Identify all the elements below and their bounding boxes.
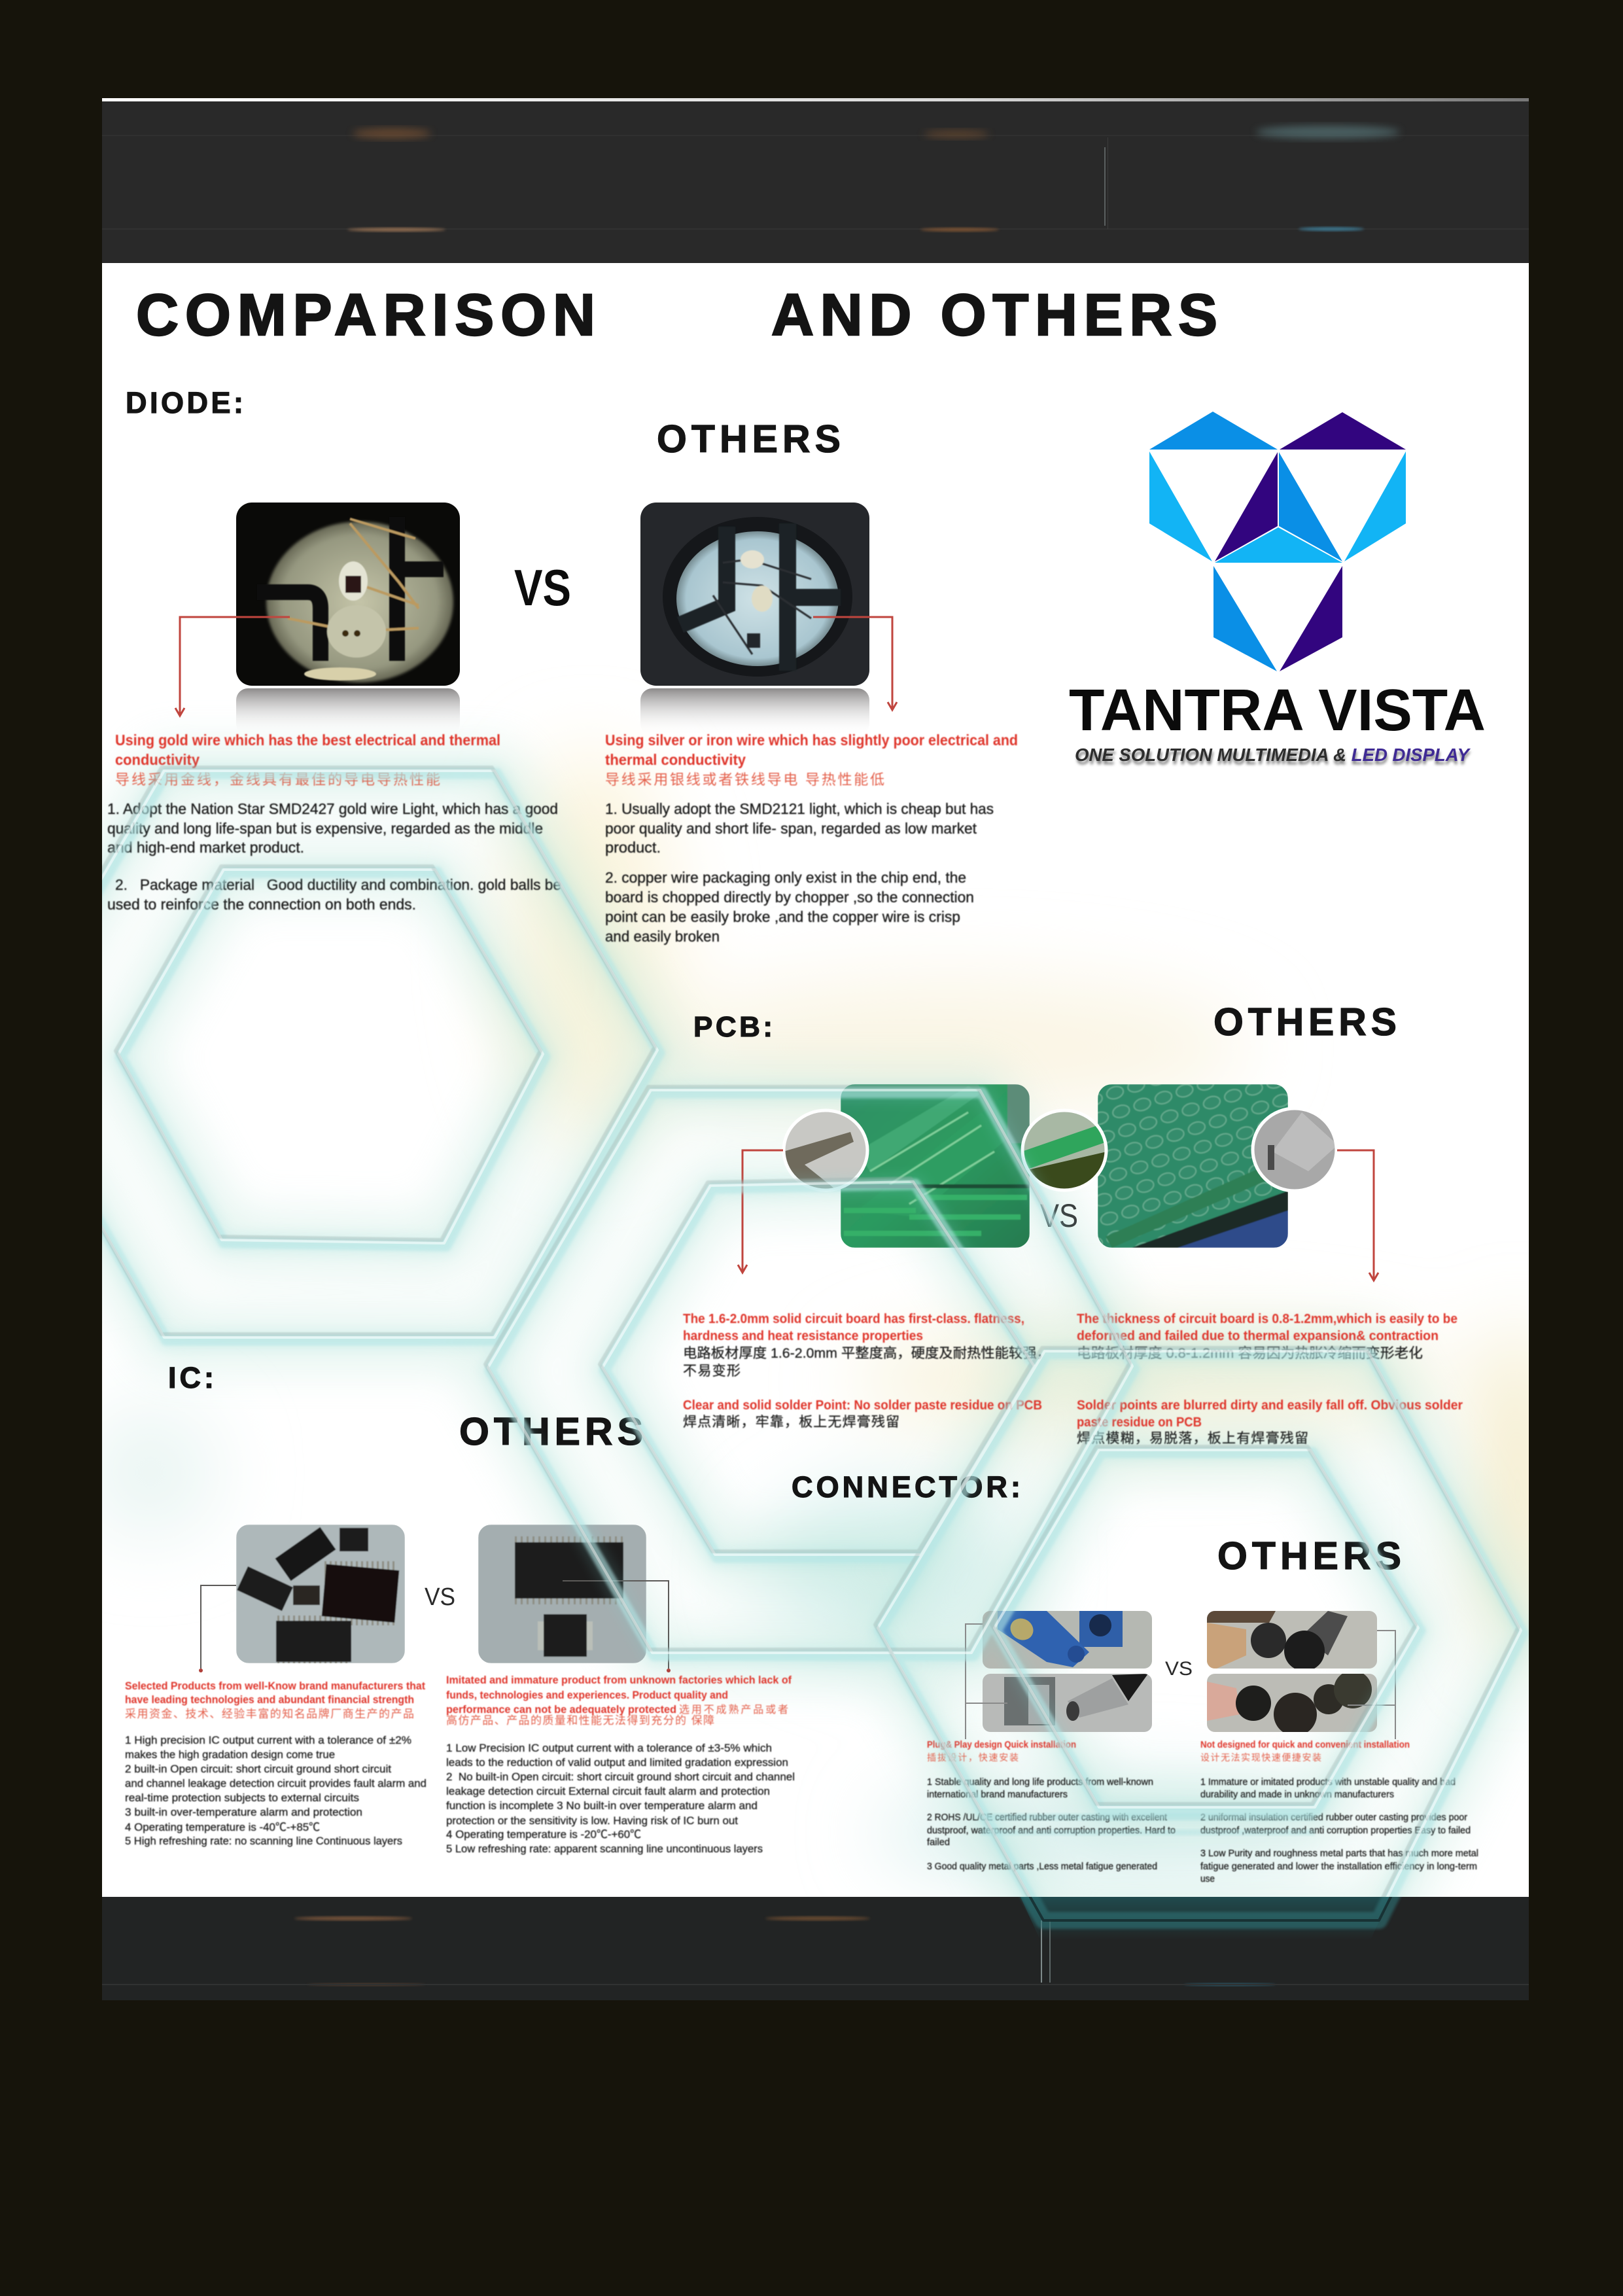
text: quality connector description: international brand manufacturers [927,1790,1068,1800]
text: imitated IC description: 高仿产品、产品的质量和性能无法得到充分的 保障 [446,1714,714,1727]
text: thin board description: paste residue on PCB [1077,1415,1202,1430]
text: quality connector description: dustproof, waterproof and anti corruption properties. Hard to [927,1826,1176,1836]
text: silver wire description: 2. copper wire packaging only exist in the chip end, the [605,869,966,886]
text: selected IC description: 3 built-in over-temperature alarm and protection [125,1806,362,1818]
arrow: solid board callout [738,1150,783,1273]
text: other connector description: use [1200,1874,1215,1884]
arrow: thin board callout [1337,1150,1378,1280]
heading: others: OTHERS [1213,1000,1397,1044]
text: silver wire description: thermal conductivity [605,751,746,768]
logo tagline: ONE SOLUTION MULTIMEDIA & LED DISPLAY [1075,745,1471,765]
heading: pcb: PCB: [693,1011,773,1043]
text: other connector description: Not designed for quick and convenient installation [1200,1740,1410,1750]
text: thin board description: 焊点模糊，易脱落，板上有焊膏残留 [1077,1431,1308,1446]
text: solid board description: Clear and solid solder Point: No solder paste residue on PCB [683,1398,1042,1413]
text: gold wire description: 1. Adopt the Nation Star SMD2427 gold wire Light, which has a good [107,800,558,817]
heading: others: OTHERS [657,417,841,461]
text: silver wire description: point can be easily broke ,and the copper wire is crisp [605,908,960,925]
text: gold wire description: used to reinforce the connection on both ends. [107,896,416,913]
reflection: gold wire LED [236,688,460,735]
logo mark [1149,412,1406,671]
vs label: VS [1040,1197,1078,1234]
text: imitated IC description: performance can not be adequately protected [446,1704,676,1716]
photo: silver wire LED [640,503,869,686]
text: selected IC description [125,1680,427,1847]
arrow: silver wire callout [813,617,897,710]
text: gold wire description [107,732,561,913]
photo: selected ICs [236,1525,405,1663]
text: quality connector description: Plug& Play design Quick installation [927,1740,1076,1750]
photo: gold wire LED [236,503,460,686]
text: thin board description: Solder points are blurred dirty and easily fall off. Obvious solder [1077,1398,1463,1413]
text: solid board description: The 1.6-2.0mm solid circuit board has first-class. flatness, [683,1312,1024,1326]
heading: ic: IC: [168,1361,214,1394]
heading: diode: DIODE: [126,386,243,419]
infographic canvas [102,98,1529,2000]
text: quality connector description [927,1740,1176,1872]
text: solid board description [683,1312,1051,1430]
text: imitated IC description [446,1674,795,1855]
text: selected IC description: 2 built-in Open circuit: short circuit ground short circuit [125,1763,391,1775]
photo: black cable connector [1207,1670,1377,1736]
text: quality connector description: 3 Good quality metal parts ,Less metal fatigue generated [927,1862,1157,1872]
text: imitated IC description: funds, technologies and experiences. Product quality and [446,1689,728,1701]
section: diode [107,386,1018,945]
text: quality connector description: failed [927,1837,950,1848]
logo: Tantra Vista [1069,412,1486,768]
photo: solid circuit board [841,1084,1030,1248]
text: silver wire description: product. [605,839,661,856]
reflection: silver wire LED [640,688,869,735]
photo: blue powercon connector [983,1611,1152,1669]
text: selected IC description: makes the high gradation design come true [125,1748,335,1761]
text: gold wire description: conductivity [115,751,200,768]
text: gold wire description: quality and long life-span but is expensive, regarded as the middle [107,820,543,837]
text: other connector description: dustproof ,waterproof and anti corruption properties Easy to failed [1200,1826,1471,1836]
text: selected IC description: Selected Products from well-Know brand manufacturers that [125,1680,425,1692]
text: selected IC description: and channel leakage detection circuit provides fault alarm and [125,1777,427,1790]
vs label: VS [425,1583,455,1611]
connector bracket: left [966,1624,1007,1739]
text: selected IC description: 5 High refreshing rate: no scanning line Continuous layers [125,1835,402,1847]
text: other connector description [1200,1740,1478,1884]
logo wordmark: TANTRA VISTA [1069,678,1486,743]
heading: others: OTHERS [459,1410,643,1453]
text: thin board description: The thickness of circuit board is 0.8-1.2mm,which is easily to be [1077,1312,1457,1326]
text: silver wire description: Using silver or iron wire which has slightly poor electrical and [605,732,1018,749]
text: silver wire description: poor quality and short life- span, regarded as low market [605,820,977,837]
vs label: VS [514,559,571,616]
glowing glass hexagon outlines [0,768,1523,1920]
text: solid board description: 不易变形 [683,1364,741,1379]
text: imitated IC description: 2 No built-in Open circuit: short circuit ground short circuit and channel [446,1771,795,1783]
text: other connector description: 1 Immature or imitated products with unstable quality and bad [1200,1777,1456,1788]
section: IC [125,1361,795,1855]
text: selected IC description: 采用资金、技术、经验丰富的知名品牌厂商生产的产品 [125,1708,414,1720]
background colour glows [4,752,1550,1920]
section: connector [792,1470,1478,1884]
text: silver wire description [605,732,1018,945]
text: other connector description: durability and made in unknown manufacturers [1200,1790,1394,1800]
text: thin board description: 电路板材厚度 0.8-1.2mm 容易因为热胀冷缩而变形老化 [1077,1346,1423,1361]
text: gold wire description: 2. Package material Good ductility and combination. gold balls be [115,876,561,893]
text: quality connector description: 插拔设计，快速安装 [927,1752,1019,1763]
text: other connector description: 设计无法实现快速便捷安装 [1200,1752,1321,1763]
inset: board edge [1022,1110,1107,1191]
inset: solid board thickness [783,1110,868,1191]
vs label: VS [1165,1658,1193,1680]
arrow: gold wire callout [175,617,290,716]
text: imitated IC description: 1 Low Precision IC output current with a tolerance of ±3-5% which [446,1742,772,1754]
text: gold wire description: and high-end market product. [107,839,304,856]
text: imitated IC description: function is incomplete 3 No built-in over temperature alarm and [446,1799,758,1812]
title: COMPARISON [136,283,595,348]
text: other connector description: 3 Low Purity and roughness metal parts that has much more metal [1200,1848,1478,1859]
text: imitated IC description: protection or the sensitivity is low. Having risk of IC burn out [446,1814,738,1827]
text: imitated IC description: 选用不成熟产品或者 [679,1704,788,1716]
text: thin board description [1077,1312,1463,1446]
text: imitated IC description: leads to the reduction of valid output and limited gradation expression [446,1756,788,1769]
text: selected IC description: 4 Operating temperature is -40℃-+85℃ [125,1821,320,1833]
text: solid board description: 焊点清晰，牢靠，板上无焊膏残留 [683,1415,899,1430]
white content panel [102,263,1529,1897]
header band [102,98,1529,263]
title [136,283,1217,348]
text: imitated IC description: 4 Operating temperature is -20℃-+60℃ [446,1828,641,1841]
text: other connector description: 2 uniformal insulation certified rubber outer casting provides poor [1200,1812,1467,1823]
text: gold wire description: 导线采用金线，金线具有最佳的导电导热性能 [115,771,440,788]
text: silver wire description: board is chopped directly by chopper ,so the connection [605,889,974,906]
text: thin board description: deformed and failed due to thermal expansion& contraction [1077,1329,1439,1343]
text: selected IC description: have leading technologies and abundant financial strength [125,1694,414,1706]
arrow: imitated IC callout [563,1581,671,1672]
text: imitated IC description: leakage detection circuit External circuit fault alarm and protection [446,1785,770,1797]
text: solid board description: hardness and heat resistance properties [683,1329,923,1343]
heading: connector: CONNECTOR: [792,1470,1021,1504]
text: gold wire description: Using gold wire which has the best electrical and thermal [115,732,500,749]
arrow: selected IC callout [199,1585,236,1672]
text: silver wire description: 1. Usually adopt the SMD2121 light, which is cheap but has [605,800,994,817]
text: selected IC description: 1 High precision IC output current with a tolerance of ±2% [125,1734,411,1746]
text: solid board description: 电路板材厚度 1.6-2.0mm 平整度高，硬度及耐热性能较强， [683,1346,1051,1361]
photo: thin circuit board [1098,1084,1288,1248]
photo: imitated ICs [478,1525,646,1663]
heading: others: OTHERS [1217,1534,1401,1578]
text: quality connector description: 2 ROHS /UL/CE certified rubber outer casting with excellent [927,1812,1167,1823]
text: imitated IC description: Imitated and immature product from unknown factories which lack of [446,1674,792,1686]
title: AND OTHERS [771,283,1217,348]
logo tagline shadow: ONE SOLUTION MULTIMEDIA & LED DISPLAY [1076,748,1471,768]
connector bracket: right [1348,1631,1395,1739]
footer band [102,1897,1529,2000]
photo: metal connector [1207,1611,1377,1671]
text: silver wire description: 导线采用银线或者铁线导电 导热性能低 [605,771,884,788]
inset: thin board thickness [1253,1108,1338,1191]
section: PCB [683,1000,1463,1446]
text: selected IC description: real-time protection subjects to external circuits [125,1792,359,1804]
text: imitated IC description: 5 Low refreshing rate: apparent scanning line uncontinuous layers [446,1843,763,1855]
text: quality connector description: 1 Stable quality and long life products from well-known [927,1777,1153,1788]
text: other connector description: fatigue generated and lower the installation efficiency in long-term [1200,1862,1477,1872]
photo: XLR connector [983,1674,1152,1732]
text: silver wire description: and easily broken [605,928,720,945]
